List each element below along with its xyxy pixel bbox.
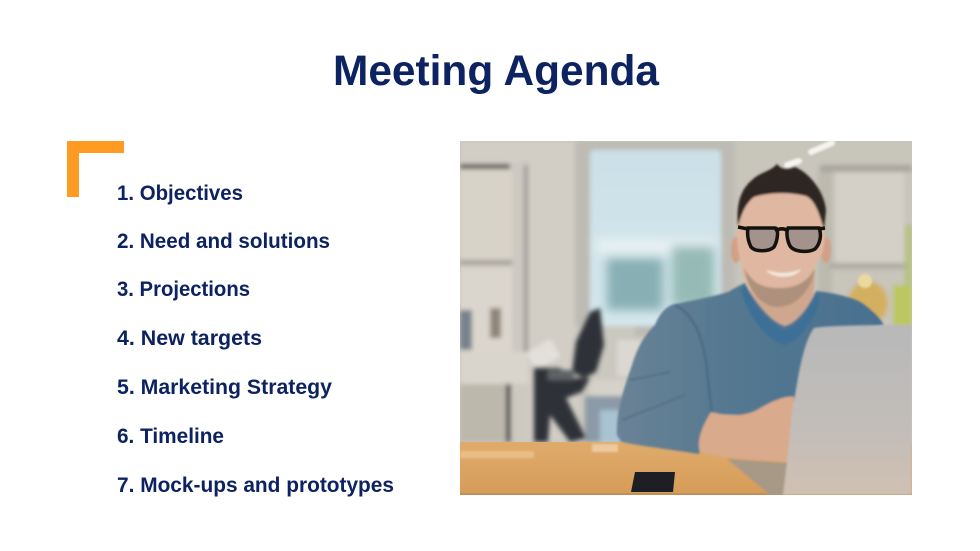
table: [460, 442, 912, 495]
man: [617, 164, 884, 462]
arm and hand: [699, 397, 795, 462]
agenda item 3: 3. Projections: [117, 278, 250, 301]
agenda item 7: 7. Mock-ups and prototypes: [117, 474, 394, 497]
sweater: [617, 283, 884, 454]
icon: orange corner bracket: [67, 141, 124, 197]
agenda item 6: 6. Timeline: [117, 425, 224, 448]
ceiling lights: [787, 143, 832, 165]
phone on table: [631, 472, 675, 492]
glasses: [738, 227, 825, 251]
agenda item 2: 2. Need and solutions: [117, 230, 330, 253]
window view outside: [596, 238, 716, 310]
neck: [748, 270, 815, 332]
ears: [731, 237, 741, 263]
agenda item 4: 4. New targets: [117, 327, 262, 350]
agenda list: [117, 182, 394, 497]
hair: [738, 164, 826, 230]
laptop: [727, 325, 912, 495]
stubble: [744, 268, 815, 307]
title: Meeting Agenda: [333, 47, 660, 95]
photo: smiling man at a laptop in an office: [460, 141, 912, 495]
agenda item 5: 5. Marketing Strategy: [117, 376, 332, 399]
agenda item 1: 1. Objectives: [117, 182, 243, 205]
office chair: [534, 308, 604, 442]
smile: [766, 269, 801, 277]
head: [737, 190, 825, 307]
